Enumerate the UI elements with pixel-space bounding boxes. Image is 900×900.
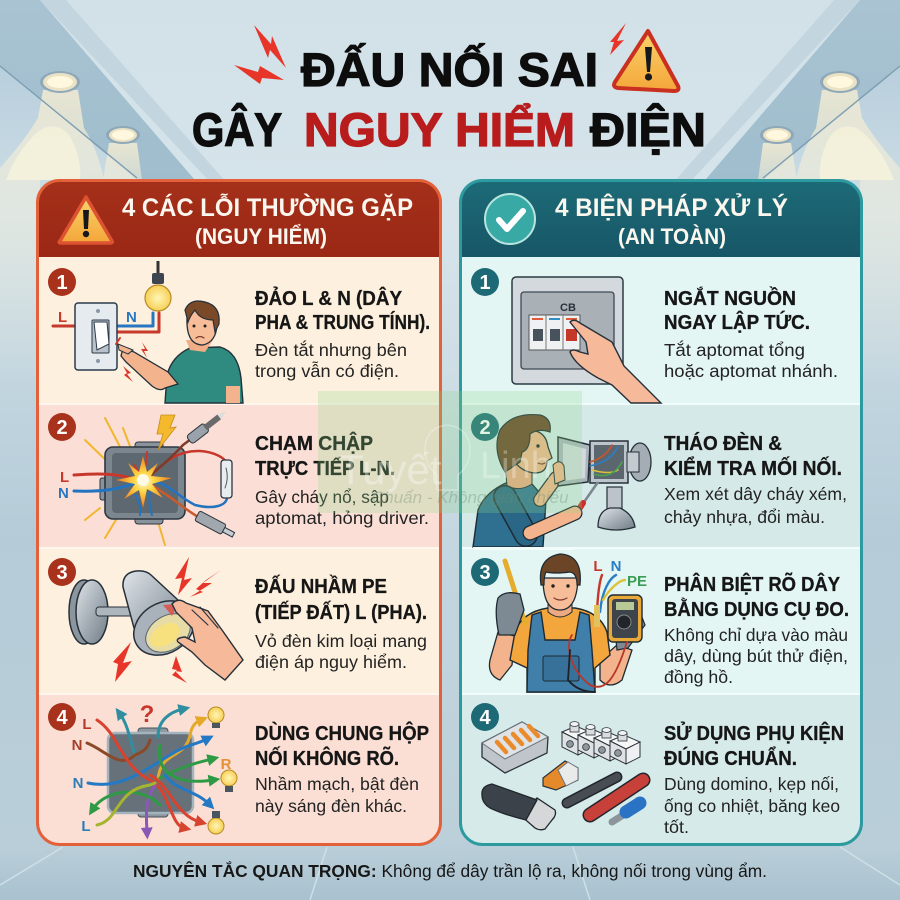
remedy 3: measure wires <box>471 554 849 692</box>
badge 2: 2 <box>479 417 491 439</box>
watermark overlay <box>318 391 582 513</box>
fault 3 text: Vỏ đèn kim loại mang <box>255 631 427 651</box>
icon: connectors, domino, heat-shrink, ferrule <box>482 722 643 830</box>
remedy 3 text: Không chỉ dựa vào màu <box>664 625 848 645</box>
badge 4 <box>471 703 499 731</box>
icon: switch, bulb and person <box>53 261 243 403</box>
fault 2 text: CHẠM CHẬP <box>255 431 373 455</box>
remedy 4: proper accessories <box>471 703 844 837</box>
badge 1 <box>48 268 76 296</box>
title line 2 <box>192 103 706 156</box>
icon: tangled wires in junction box: ? <box>140 701 154 728</box>
badge 3: 3 <box>56 562 68 584</box>
badge 3 <box>471 558 499 586</box>
badge 2: 2 <box>56 417 68 439</box>
icon: left lightning bolts <box>234 25 286 84</box>
icon: tangled wires in junction box: N <box>72 737 82 754</box>
panel header: remedies: (AN TOÀN) <box>618 224 726 249</box>
fault 4: shared junction box <box>48 701 429 835</box>
remedy 4 text: ĐÚNG CHUẨN. <box>664 746 797 770</box>
title <box>192 23 706 156</box>
fault 4 text: NỐI KHÔNG RÕ. <box>255 746 399 770</box>
title line 2: GÂY <box>192 103 282 156</box>
badge 1: 1 <box>56 272 68 294</box>
icon: warning triangle <box>59 197 112 243</box>
fault 4 text: Nhầm mạch, bật đèn <box>255 774 419 794</box>
fault 4 text: DÙNG CHUNG HỘP <box>255 721 429 745</box>
icon: circuit breaker panel with hand <box>512 277 661 403</box>
panel header: remedies <box>485 192 788 249</box>
title line 2: NGUY HIỂM <box>304 103 575 156</box>
fault 1: reversed L and N <box>48 261 430 403</box>
panel header: faults: (NGUY HIỂM) <box>195 224 327 249</box>
icon: warning triangle <box>614 31 678 91</box>
badge 4 <box>48 703 76 731</box>
fault 3 text: (TIẾP ĐẤT) L (PHA). <box>255 601 427 624</box>
fault 2 text <box>255 431 429 528</box>
footer note: NGUYÊN TẮC QUAN TRỌNG: Không để dây trần lộ ra, không nối trong vùng ẩm. <box>133 860 767 881</box>
remedy 1 text: Tắt aptomat tổng <box>664 339 805 360</box>
fault 3 text <box>255 575 427 672</box>
icon: man inspecting junction box <box>473 415 651 550</box>
fault 1 text: PHA & TRUNG TÍNH). <box>255 311 430 334</box>
remedy 2 text: Xem xét dây cháy xém, <box>664 484 847 504</box>
remedy 2 text: THÁO ĐÈN & <box>664 432 782 455</box>
fault 4 text <box>255 721 429 816</box>
fault 2 text: Gây cháy nổ, sập <box>255 487 389 507</box>
remedy 4 text: tốt. <box>664 817 689 837</box>
remedy 3 text <box>664 572 849 687</box>
fault 4 text: này sáng đèn khác. <box>255 796 407 816</box>
title line 1: ĐẤU NỐI SAI <box>301 43 598 96</box>
remedy 2 text <box>664 432 847 527</box>
icon: electrician with tester and multimeter <box>489 554 647 692</box>
title line 2: ĐIỆN <box>590 103 706 156</box>
remedy 4 text: Dùng domino, kẹp nối, <box>664 774 839 794</box>
panel: remedies <box>460 180 862 845</box>
remedy 2 text: KIỂM TRA MỐI NỐI. <box>664 456 842 480</box>
remedy 1 text: NGẮT NGUỒN <box>664 286 796 310</box>
remedy 3 text: PHÂN BIỆT RÕ DÂY <box>664 572 841 596</box>
remedy 1 text <box>664 286 838 381</box>
fault 1 text: trong vẫn có điện. <box>255 360 399 381</box>
badge 4: 4 <box>56 707 68 729</box>
panel header: faults: 4 CÁC LỖI THƯỜNG GẶP <box>122 192 413 222</box>
icon: electrician with tester and multimeter: PE <box>627 573 647 590</box>
remedy 3 text: BẰNG DỤNG CỤ ĐO. <box>664 597 849 621</box>
fault 2 text: TRỰC TIẾP L-N. <box>255 457 395 480</box>
icon: electrician with tester and multimeter: N <box>611 558 621 575</box>
panel: common faults <box>37 180 441 845</box>
icon: right lightning bolt <box>610 23 626 55</box>
icon: check mark <box>485 194 535 244</box>
badge 2 <box>471 413 499 441</box>
remedy 1 text: NGAY LẬP TỨC. <box>664 310 810 334</box>
icon: tangled wires in junction box: R <box>221 756 232 773</box>
remedy 2: inspect connections <box>471 413 847 550</box>
fault 2: direct short circuit <box>48 407 429 545</box>
remedy 4 text: ống co nhiệt, băng keo <box>664 796 840 816</box>
remedy 4 text <box>664 721 844 837</box>
remedy 3 text: đồng hồ. <box>664 667 733 687</box>
icon: tangled wires in junction box: N <box>73 775 83 792</box>
icon: switch, bulb and person: N <box>126 309 137 326</box>
badge 3 <box>48 558 76 586</box>
icon: circuit breaker panel with hand: CB <box>560 302 576 314</box>
remedy 3 text: dây, dùng bút thử điện, <box>664 646 848 666</box>
icon: junction box with sparks: N <box>58 485 69 502</box>
icon: metal lamp with hand <box>69 557 243 683</box>
fault 3 text: ĐẤU NHẦM PE <box>255 575 387 598</box>
badge 2 <box>48 413 76 441</box>
watermark overlay: Chuẩn - Không gian chiếu <box>372 488 569 507</box>
icon: tangled wires in junction box <box>72 701 237 835</box>
watermark overlay: Linh <box>480 445 552 487</box>
badge 1 <box>471 268 499 296</box>
fault 1 text <box>255 286 430 381</box>
icon: tangled wires in junction box: L <box>82 716 92 733</box>
badge 3: 3 <box>479 562 491 584</box>
fault 1 text: ĐẢO L & N (DÂY <box>255 286 403 310</box>
badge 4: 4 <box>479 707 491 729</box>
panel header: remedies: 4 BIỆN PHÁP XỬ LÝ <box>555 192 788 222</box>
icon: junction box with sparks <box>58 407 236 545</box>
icon: tangled wires in junction box: L <box>81 818 91 835</box>
fault 1 text: Đèn tắt nhưng bên <box>255 339 407 360</box>
fault 3 text: điện áp nguy hiểm. <box>255 652 407 672</box>
panel header: faults <box>59 192 413 249</box>
badge 1: 1 <box>479 272 491 294</box>
fault 3: PE wired to L <box>48 557 427 683</box>
icon: junction box with sparks: L <box>60 469 69 486</box>
icon: switch, bulb and person: L <box>58 309 67 326</box>
icon: electrician with tester and multimeter: L <box>593 558 603 575</box>
remedy 1 text: hoặc aptomat nhánh. <box>664 361 838 381</box>
watermark overlay: Tuyết <box>338 446 442 493</box>
remedy 2 text: chảy nhựa, đổi màu. <box>664 507 825 527</box>
fault 2 text: aptomat, hỏng driver. <box>255 508 429 528</box>
remedy 1: cut power <box>471 268 838 403</box>
remedy 4 text: SỬ DỤNG PHỤ KIỆN <box>664 721 844 745</box>
